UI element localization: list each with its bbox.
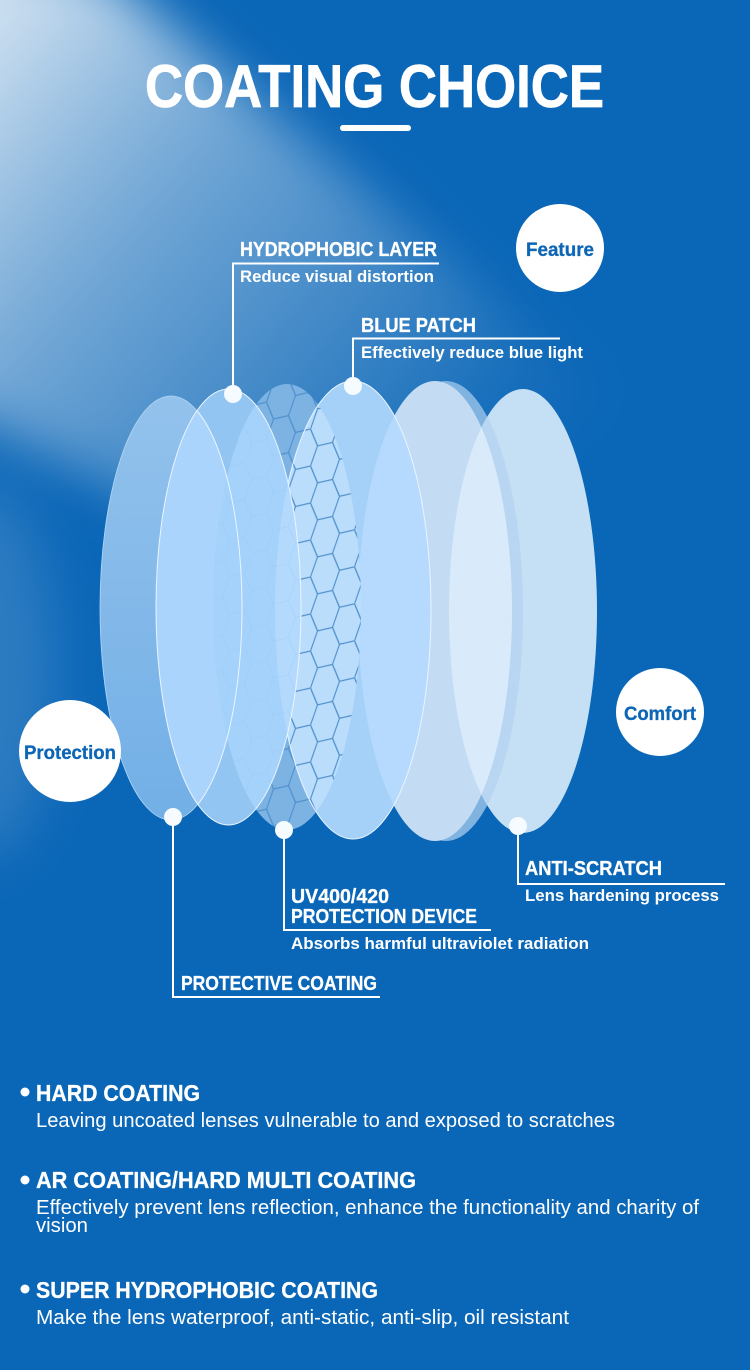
item: super hydrophobic coating bbox=[20, 1277, 569, 1329]
callout: UV400/420 protection device: PROTECTION DEVICE bbox=[291, 906, 477, 928]
title underline bbox=[340, 125, 411, 131]
callout: UV400/420 protection device bbox=[275, 821, 589, 953]
item: hard coating: HARD COATING bbox=[36, 1080, 200, 1106]
badge: protection bbox=[19, 700, 121, 802]
lens: protective coating bbox=[100, 396, 242, 820]
item: AR coating bbox=[20, 1167, 699, 1237]
callout: hydrophobic layer: HYDROPHOBIC LAYER bbox=[240, 239, 437, 261]
lens: anti-reflection layer bbox=[358, 381, 512, 841]
badge: comfort bbox=[616, 668, 704, 756]
lens: back ring of anti-reflection layer bbox=[369, 381, 523, 841]
lens: UV400 honeycomb device bbox=[213, 384, 361, 830]
badge: feature bbox=[516, 204, 604, 292]
lens: hydrophobic layer bbox=[156, 388, 302, 826]
lens: anti-scratch bbox=[449, 389, 597, 833]
callout: blue patch bbox=[344, 315, 583, 395]
item: super hydrophobic coating: Make the lens waterproof, anti-static, anti-slip, oil resistant bbox=[36, 1307, 569, 1329]
callout: anti-scratch bbox=[509, 817, 725, 905]
lens stack bbox=[100, 381, 597, 841]
title: COATING CHOICE bbox=[145, 53, 604, 120]
callout: anti-scratch: Lens hardening process bbox=[525, 886, 719, 905]
callout: protective coating: PROTECTIVE COATING bbox=[181, 973, 377, 995]
callout: protective coating bbox=[164, 808, 380, 997]
badge: feature: Feature bbox=[526, 240, 594, 261]
badge: comfort: Comfort bbox=[624, 704, 697, 725]
callout: UV400/420 protection device: Absorbs harmful ultraviolet radiation bbox=[291, 934, 589, 953]
callout: UV400/420 protection device: UV400/420 bbox=[291, 886, 389, 908]
callout: hydrophobic layer: Reduce visual distortion bbox=[240, 267, 434, 286]
lens: blue patch bbox=[288, 382, 432, 840]
item: hard coating bbox=[20, 1080, 615, 1132]
callout: blue patch: Effectively reduce blue light bbox=[361, 343, 583, 362]
item: hard coating: Leaving uncoated lenses vulnerable to and exposed to scratches bbox=[36, 1110, 615, 1132]
callout: blue patch: BLUE PATCH bbox=[361, 315, 476, 337]
item: AR coating: Effectively prevent lens reflection, enhance the functionality and charity of bbox=[36, 1197, 699, 1219]
badge: protection: Protection bbox=[24, 743, 116, 764]
item: AR coating: AR COATING/HARD MULTI COATING bbox=[36, 1167, 416, 1193]
item: AR coating: vision bbox=[36, 1215, 88, 1237]
callout: anti-scratch: ANTI-SCRATCH bbox=[525, 858, 662, 880]
callout: hydrophobic layer bbox=[224, 239, 439, 403]
item: super hydrophobic coating: SUPER HYDROPHOBIC COATING bbox=[36, 1277, 378, 1303]
